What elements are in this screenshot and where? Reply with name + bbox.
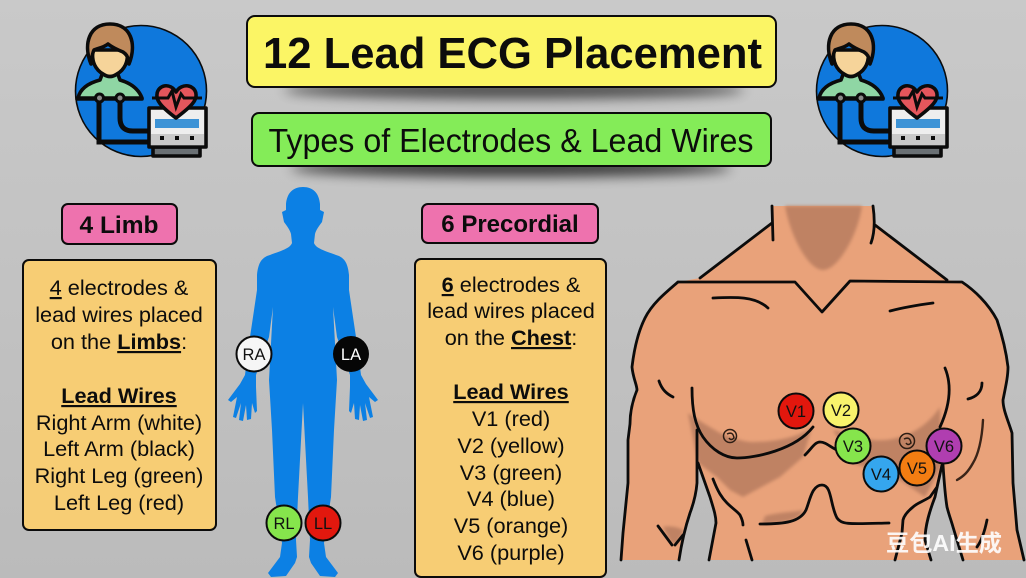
electrode V5: V5 [907, 460, 927, 478]
title banner: 12 Lead ECG Placement [263, 29, 762, 78]
icon: clinician with heart monitor, right [816, 24, 948, 156]
panel: precordial lead text: V6 (purple) [457, 540, 565, 565]
blue body figure [228, 187, 378, 577]
electrode LL: LL [314, 515, 332, 533]
watermark: 豆包AI生成 [886, 530, 1002, 556]
panel: precordial lead text: lead wires placed [427, 298, 595, 323]
torso outlines [621, 206, 1024, 560]
heading: 4 Limb: 4 Limb [80, 212, 158, 239]
panel: precordial lead text: Lead Wires [453, 379, 569, 404]
electrode RL: RL [273, 515, 295, 533]
icon: clinician with heart monitor, left [76, 24, 206, 156]
electrode RA: RA [243, 346, 265, 364]
heading: 4 Limb [62, 204, 177, 244]
electrode V2: V2 [831, 402, 851, 420]
body silhouette with limb electrodes [228, 187, 378, 577]
panel: precordial lead text: V1 (red) [472, 406, 550, 431]
panel: limb lead text: Right Arm (white) [36, 410, 202, 435]
chest illustration with precordial electrodes [621, 206, 1024, 560]
electrode RL [266, 506, 302, 540]
panel: precordial lead text: on the Chest: [445, 325, 577, 350]
nipple right [900, 434, 914, 448]
electrode V6: V6 [934, 438, 954, 456]
subtitle banner [252, 113, 771, 177]
electrode RA [236, 336, 272, 372]
torso fill [621, 206, 1024, 560]
neck and chest shading [663, 206, 942, 545]
panel: limb lead text: Left Arm (black) [43, 436, 195, 461]
electrode LA [333, 336, 369, 372]
panel: precordial lead text [415, 259, 606, 577]
electrode V1 [778, 394, 814, 428]
electrode V1: V1 [786, 403, 806, 421]
arm crease [957, 420, 983, 480]
electrode V5 [900, 450, 934, 486]
panel: limb lead text [23, 260, 216, 530]
panel: precordial lead text: V3 (green) [460, 460, 562, 485]
panel: precordial lead text: V2 (yellow) [457, 433, 565, 458]
subtitle banner: Types of Electrodes & Lead Wires [268, 122, 754, 159]
electrode V6 [926, 428, 962, 464]
electrode V3: V3 [843, 438, 863, 456]
muscle and crease lines [658, 297, 987, 560]
heading: 6 Precordial [422, 204, 598, 243]
electrode LL [306, 506, 340, 540]
electrode V4: V4 [871, 466, 891, 484]
panel: precordial lead text: 6 electrodes & [442, 272, 581, 297]
title banner [247, 16, 776, 99]
electrode V3 [836, 428, 870, 464]
panel: precordial lead text: V4 (blue) [467, 486, 555, 511]
panel: limb lead text: lead wires placed [35, 302, 203, 327]
panel: limb lead text: Left Leg (red) [54, 490, 184, 515]
nipple left [724, 430, 736, 442]
panel: limb lead text: on the Limbs: [51, 329, 187, 354]
panel: limb lead text: Right Leg (green) [35, 463, 203, 488]
electrode LA: LA [341, 346, 361, 364]
electrode V4 [864, 456, 898, 492]
panel: limb lead text: 4 electrodes & [50, 275, 189, 300]
heading: 6 Precordial: 6 Precordial [441, 211, 579, 238]
electrode V2 [824, 392, 858, 428]
panel: precordial lead text: V5 (orange) [454, 513, 568, 538]
panel: limb lead text: Lead Wires [61, 383, 177, 408]
